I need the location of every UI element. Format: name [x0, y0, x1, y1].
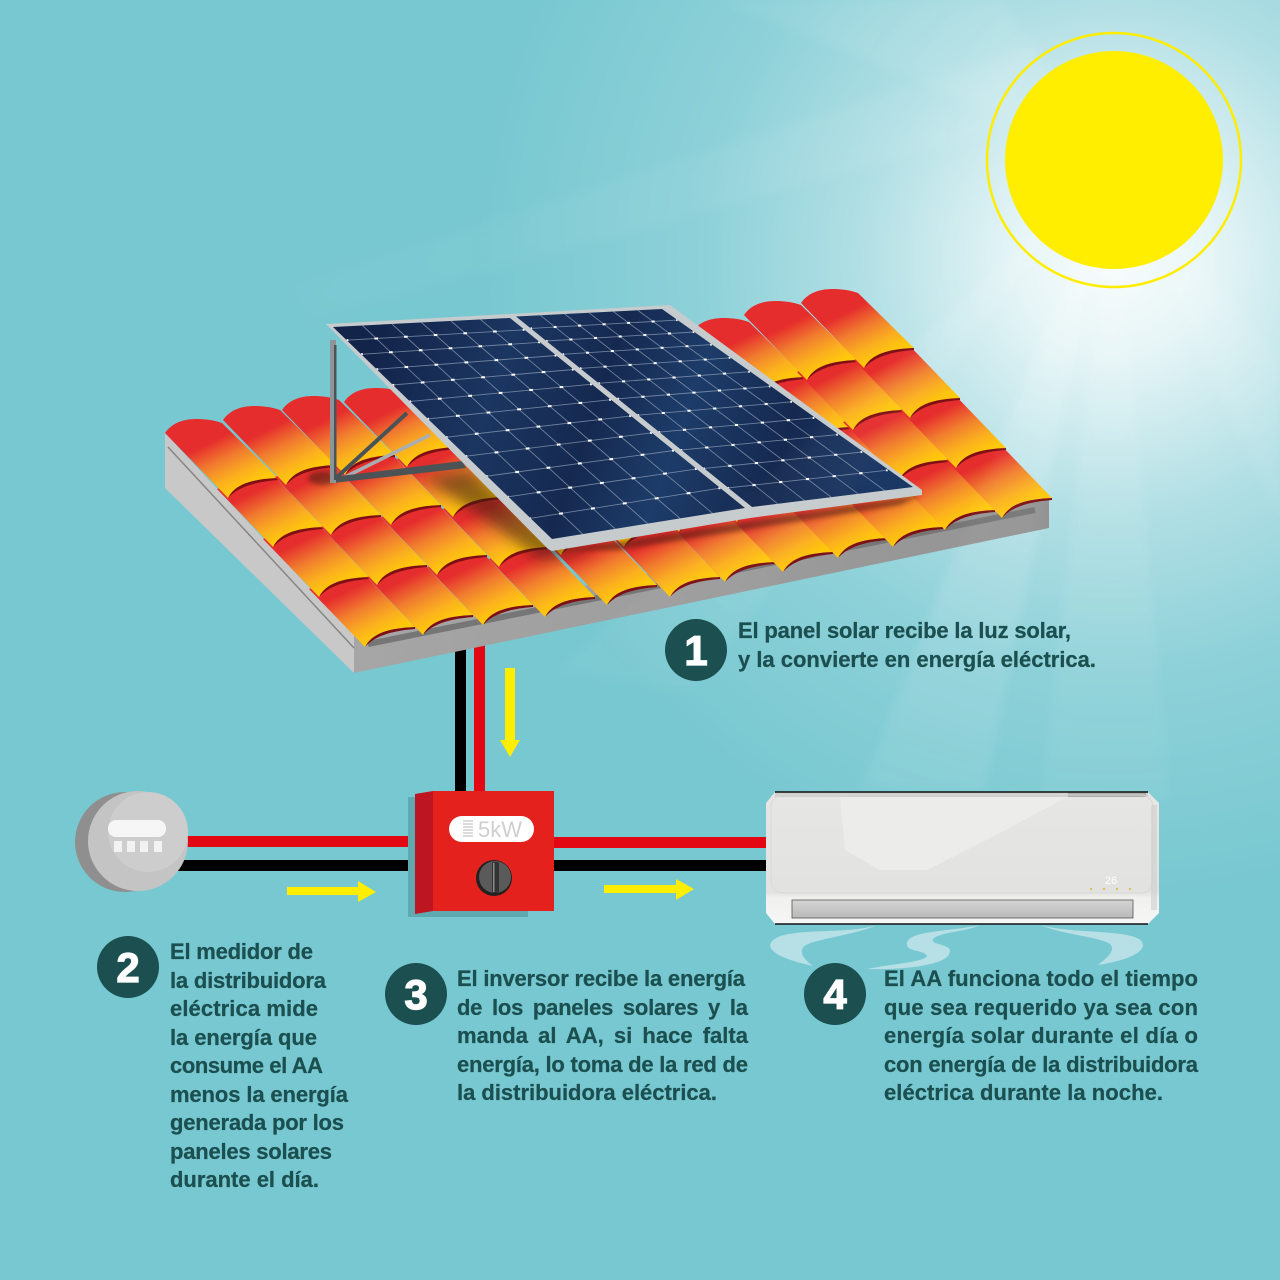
roof slab — [165, 433, 1049, 673]
step 4: 4 — [823, 971, 847, 1018]
vertical wires from panel to inverter — [455, 640, 485, 795]
step 4: energía solar durante el día o — [884, 1023, 1198, 1048]
step 4 — [804, 963, 1199, 1105]
panel stand — [330, 340, 466, 483]
panel shadow on roof — [308, 470, 922, 560]
step 2: consume el AA — [170, 1053, 323, 1078]
step 4: eléctrica durante la noche. — [884, 1080, 1163, 1105]
step 2: 2 — [116, 944, 140, 991]
step 1: y la convierte en energía eléctrica. — [738, 647, 1096, 672]
yellow arrow: inverter to AC — [604, 879, 694, 900]
step 1 — [665, 618, 1096, 681]
step 2: la energía que — [170, 1025, 317, 1050]
step 1: 1 — [684, 627, 708, 674]
aluminium frame — [326, 305, 922, 551]
icon: electric meter — [75, 791, 188, 892]
tiles — [165, 289, 1052, 647]
sun — [987, 33, 1241, 287]
left solar module — [333, 318, 745, 539]
step 1: El panel solar recibe la luz solar, — [738, 618, 1071, 643]
step 3: El inversor recibe la energía — [457, 966, 746, 991]
step 3: 3 — [404, 971, 428, 1018]
step 2: eléctrica mide — [170, 996, 318, 1021]
step 2: menos la energía — [170, 1082, 349, 1107]
yellow arrow: meter to inverter — [287, 881, 376, 902]
right solar module — [516, 309, 913, 507]
step 3: de los paneles solares y la — [457, 995, 749, 1020]
step 3 — [385, 963, 749, 1105]
step 3: manda al AA, si hace falta — [457, 1023, 749, 1048]
icon: inverter box — [408, 791, 554, 917]
step 4: que sea requerido ya sea con — [884, 995, 1198, 1020]
step 3: la distribuidora eléctrica. — [457, 1080, 717, 1105]
step 2: durante el día. — [170, 1167, 319, 1192]
horizontal wires — [175, 836, 768, 871]
air conditioner unit: 26 — [1105, 875, 1117, 887]
step 2: paneles solares — [170, 1139, 332, 1164]
step 2 — [97, 936, 349, 1192]
step 3: energía, lo toma de la red de — [457, 1052, 748, 1077]
air flow swirls — [770, 925, 1143, 969]
air conditioner unit — [766, 792, 1159, 924]
solar panels — [326, 305, 922, 551]
step 2: la distribuidora — [170, 968, 327, 993]
sun rays over the roof — [560, 160, 1170, 800]
step 2: El medidor de — [170, 939, 313, 964]
icon: inverter box: 5kW — [478, 817, 522, 842]
step 4: El AA funciona todo el tiempo — [884, 966, 1198, 991]
roof with tiles — [165, 289, 1052, 673]
step 4: con energía de la distribuidora — [884, 1052, 1199, 1077]
yellow arrow: panel to inverter — [500, 668, 520, 757]
step 2: generada por los — [170, 1110, 344, 1135]
